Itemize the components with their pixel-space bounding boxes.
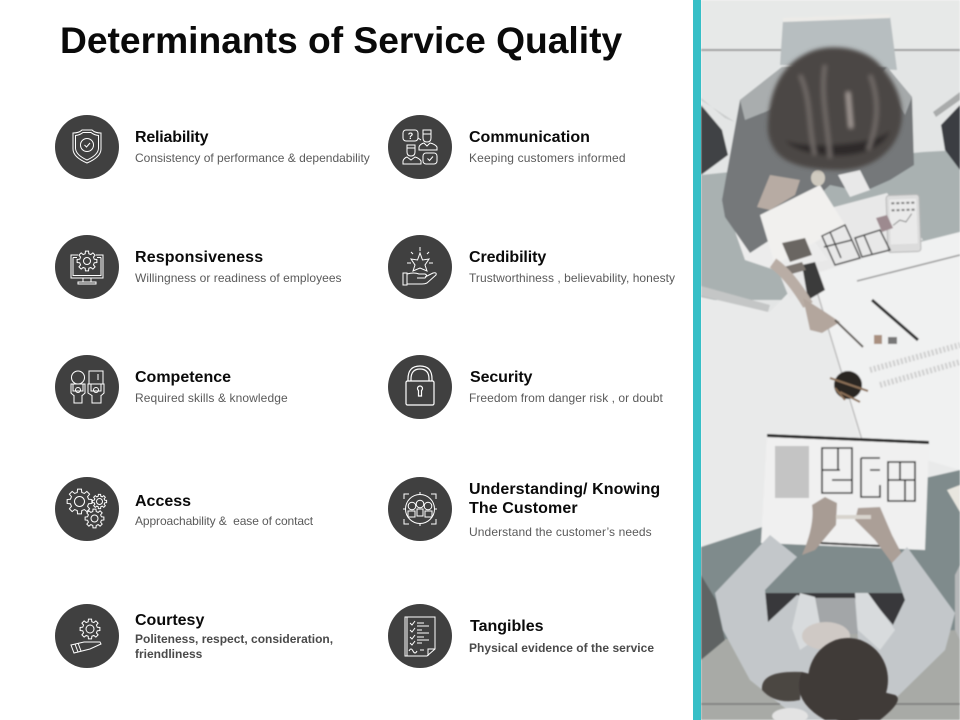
heading: Access xyxy=(135,493,191,510)
item: Responsiveness xyxy=(55,235,342,299)
icon: shield with check xyxy=(55,115,119,179)
description: Required skills & knowledge xyxy=(135,391,288,405)
item: Credibility xyxy=(388,235,675,299)
description: Physical evidence of the service xyxy=(469,641,654,655)
title: Determinants of Service Quality xyxy=(60,19,622,61)
heading: Security xyxy=(470,369,532,386)
description: Politeness, respect, consideration, xyxy=(135,632,333,646)
icon: padlock xyxy=(388,355,452,419)
item: Access xyxy=(55,477,313,541)
description: Willingness or readiness of employees xyxy=(135,271,342,285)
hair: seated figure, top xyxy=(768,47,902,170)
description: Understand the customer’s needs xyxy=(469,524,652,538)
description: Freedom from danger risk , or doubt xyxy=(469,391,663,405)
hair: seated figure, bottom xyxy=(762,638,898,720)
panel: overhead meeting photo illustration xyxy=(701,0,960,720)
heading: Communication xyxy=(469,129,590,146)
description: Approachability & ease of contact xyxy=(135,514,313,528)
heading: The Customer xyxy=(469,500,578,517)
heading: Understanding/ Knowing xyxy=(469,481,660,498)
heading: Courtesy xyxy=(135,612,204,629)
heading: Responsiveness xyxy=(135,248,263,266)
icon: hand with star xyxy=(388,235,452,299)
panel: teal stripe xyxy=(693,0,701,720)
icon: people exchanging messages: ? xyxy=(408,131,413,141)
item: Communication xyxy=(388,115,626,179)
icon: two badges xyxy=(55,355,119,419)
heading: Tangibles xyxy=(470,618,544,635)
icon: checklist document xyxy=(388,604,452,668)
item: Courtesy xyxy=(55,604,333,668)
icon: three gears xyxy=(55,477,119,541)
description xyxy=(135,632,333,660)
item: Competence xyxy=(55,355,288,419)
description: Trustworthiness , believability, honesty xyxy=(469,270,675,284)
description: Keeping customers informed xyxy=(469,151,626,165)
icon: hand holding gear xyxy=(55,604,119,668)
item: Security xyxy=(388,355,663,419)
icon: people exchanging messages xyxy=(388,115,452,179)
icon: customers in focus frame xyxy=(388,477,452,541)
heading xyxy=(469,481,660,517)
description: friendliness xyxy=(135,646,202,660)
item: Understanding / Knowing The Customer xyxy=(388,477,660,541)
item: Reliability xyxy=(55,115,370,179)
item: Tangibles xyxy=(388,604,654,668)
description: Consistency of performance & dependability xyxy=(135,151,370,165)
heading: Competence xyxy=(135,369,231,386)
icon: monitor with gear xyxy=(55,235,119,299)
heading: Reliability xyxy=(135,129,208,146)
heading: Credibility xyxy=(469,249,546,266)
